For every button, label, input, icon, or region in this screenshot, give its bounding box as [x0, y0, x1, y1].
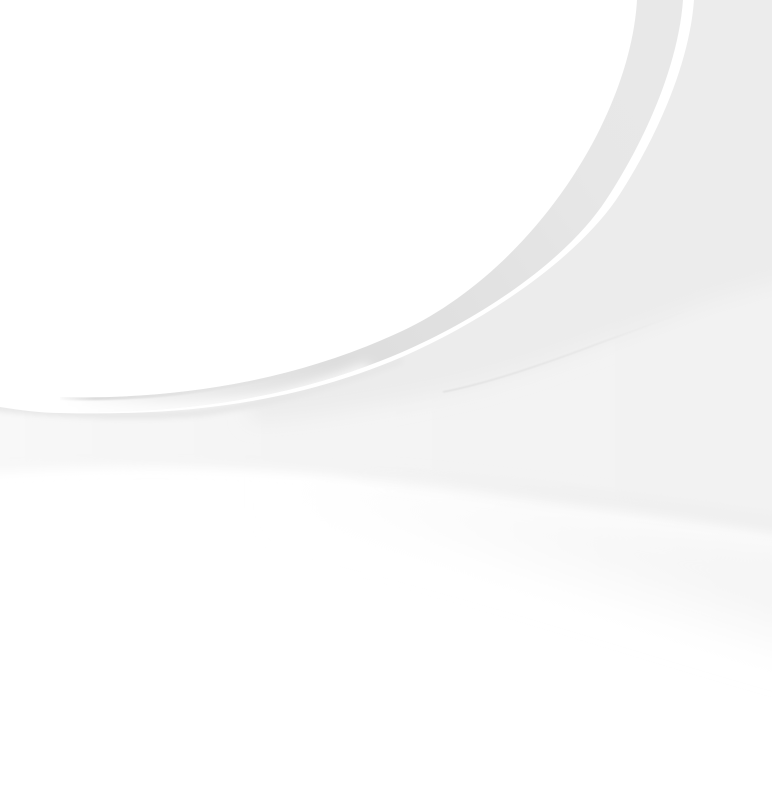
lower grey sweep — [0, 0, 772, 540]
thin dark tip along the band's upper edge — [64, 390, 200, 400]
white area and curved white stripe — [0, 0, 694, 413]
thin crease line across the grey sweep — [443, 305, 700, 392]
soft shadow below the lower sweep — [300, 480, 772, 650]
darker lower edge of the sweep — [330, 472, 772, 528]
darker upper grey panel — [250, 0, 772, 420]
soft grey shadow under the white stripe — [0, 360, 402, 415]
abstract white curved background — [0, 0, 772, 610]
curved grey band — [60, 0, 683, 412]
white glow along the lower left of the band — [143, 362, 370, 410]
